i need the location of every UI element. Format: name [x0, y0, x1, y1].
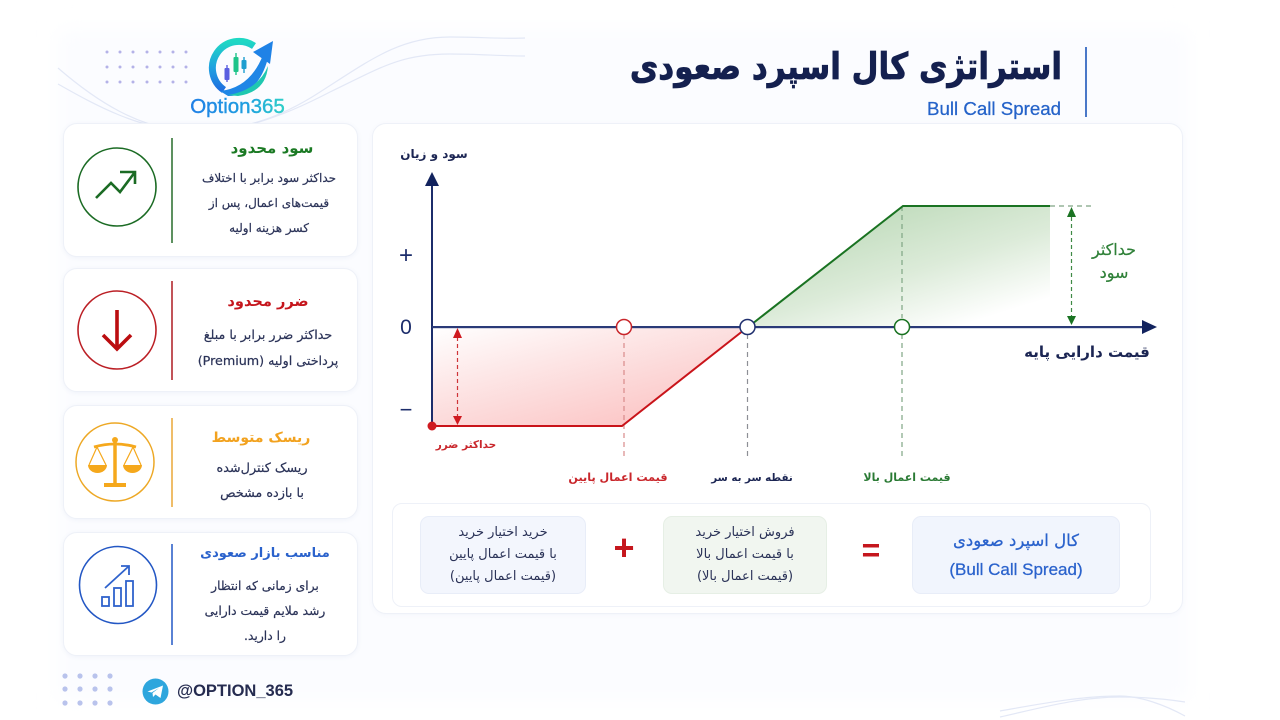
logo: Option365 — [190, 38, 285, 118]
telegram handle — [142, 678, 293, 704]
chart: bull call spread payoff — [399, 147, 1157, 484]
label: minus: − — [400, 397, 412, 422]
icon: down arrow — [77, 290, 157, 370]
body text — [205, 579, 325, 644]
label: underlying price: قیمت دارایی پایه — [1024, 343, 1150, 362]
box: sell call — [663, 516, 827, 594]
panel: formula — [392, 503, 1151, 607]
body text: ریسک کنترل‌شده — [216, 461, 308, 476]
box: result: کال اسپرد صعودی — [953, 531, 1079, 550]
divider — [171, 138, 172, 243]
divider — [171, 418, 172, 507]
body text: حداکثر ضرر برابر با مبلغ — [204, 327, 332, 342]
body text — [216, 461, 308, 501]
body text: قیمت‌های اعمال، پس از — [209, 196, 329, 210]
marker: break-even — [740, 320, 755, 334]
box: sell call: با قیمت اعمال بالا — [696, 547, 794, 562]
divider — [171, 281, 172, 380]
icon: bar chart with arrow — [78, 546, 158, 624]
box: buy call: (قیمت اعمال پایین) — [450, 569, 556, 584]
equals sign: = — [862, 532, 880, 568]
icon: rising trend — [77, 147, 157, 227]
box: sell call: فروش اختیار خرید — [695, 525, 795, 540]
label: zero: 0 — [400, 316, 412, 339]
marker: lower strike — [616, 320, 632, 334]
subtitle: Bull Call Spread — [927, 98, 1061, 119]
x axis — [432, 320, 1157, 334]
panel: limited loss — [63, 268, 358, 392]
marker: upper strike — [894, 320, 910, 334]
body text: حداکثر سود برابر با اختلاف — [202, 171, 336, 185]
panel: limited profit — [63, 123, 358, 257]
body text: پرداختی اولیه (Premium) — [198, 353, 338, 368]
plus sign: + — [613, 527, 635, 568]
loss area — [432, 328, 747, 426]
body text: برای زمانی که انتظار — [211, 579, 319, 593]
body text — [202, 171, 336, 236]
handle text: @OPTION_365 — [177, 682, 293, 700]
box: buy call: خرید اختیار خرید — [458, 525, 548, 540]
label: y axis title: سود و زیان — [400, 147, 468, 162]
heading: ریسک متوسط — [212, 430, 310, 446]
icon: scales — [75, 422, 155, 502]
divider — [171, 544, 172, 645]
panel: medium risk — [63, 405, 358, 519]
guide lines — [624, 206, 1092, 460]
box: result: (Bull Call Spread) — [949, 560, 1083, 579]
body text: رشد ملایم قیمت دارایی — [205, 604, 325, 618]
body text: را دارید. — [244, 629, 286, 643]
body text — [198, 327, 338, 368]
icon: telegram — [142, 678, 168, 704]
label: max profit: حداکثر — [1091, 240, 1136, 260]
label: lower strike: قیمت اعمال پایین — [568, 471, 668, 484]
logo: Option365: Option365 — [190, 95, 285, 118]
max profit arrow — [1067, 207, 1076, 325]
max loss point — [428, 422, 436, 430]
heading: سود محدود — [231, 139, 313, 157]
payoff line: profit — [752, 206, 1050, 324]
title: استراتژی کال اسپرد صعودی — [630, 46, 1062, 88]
label: max profit — [1091, 240, 1136, 283]
body text: با بازده مشخص — [220, 486, 304, 501]
label: upper strike: قیمت اعمال بالا — [863, 471, 951, 484]
body text: کسر هزینه اولیه — [229, 221, 309, 235]
panel: suited to bull market — [63, 532, 358, 656]
max loss arrow — [453, 328, 462, 425]
profit area — [750, 206, 1050, 326]
y axis — [425, 172, 439, 426]
label: plus: + — [399, 242, 413, 269]
box: sell call: (قیمت اعمال بالا) — [697, 569, 793, 584]
box: result — [912, 516, 1120, 594]
title accent rule — [1085, 47, 1087, 117]
label: max loss: حداکثر ضرر — [435, 439, 496, 451]
heading: ضرر محدود — [227, 293, 309, 310]
label: max profit: سود — [1100, 263, 1128, 283]
payoff line: loss — [432, 330, 744, 426]
label: break-even: نقطه سر به سر — [710, 472, 793, 484]
box: buy call — [420, 516, 586, 594]
box: buy call: با قیمت اعمال پایین — [449, 547, 557, 562]
panel: payoff chart — [372, 123, 1183, 614]
heading: مناسب بازار صعودی — [200, 546, 330, 561]
